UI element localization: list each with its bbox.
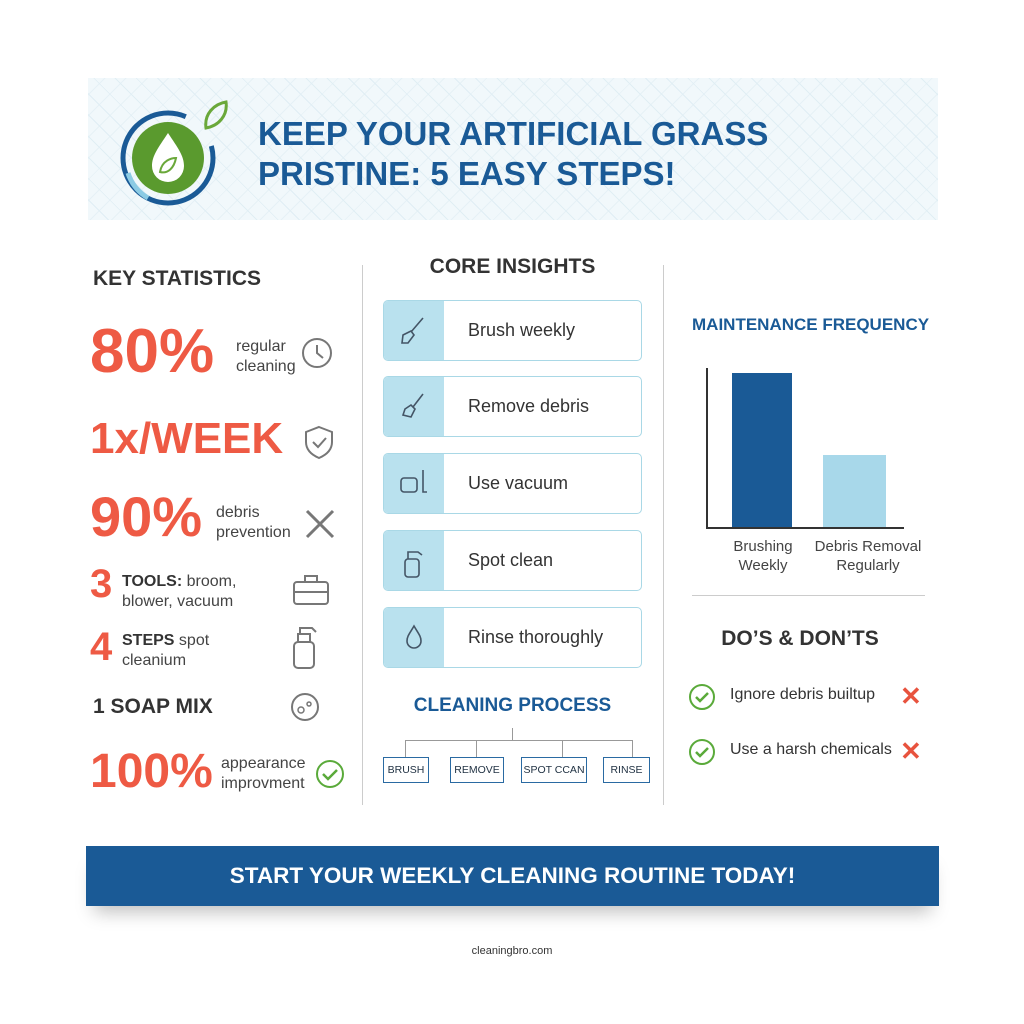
panel: key statistics: regular xyxy=(236,338,286,355)
chart: maintenance frequency xyxy=(692,315,929,574)
panel: dos and donts xyxy=(689,627,922,766)
header band xyxy=(88,78,938,220)
panel: dos and donts: ✕ xyxy=(900,736,922,766)
flow diagram xyxy=(405,728,633,757)
panel: dos and donts: ✕ xyxy=(900,681,922,711)
footer url: cleaningbro.com xyxy=(472,945,552,957)
card: spot clean xyxy=(383,530,642,591)
panel: key statistics: 90% xyxy=(90,485,202,548)
card: brush weekly: Brush weekly xyxy=(468,320,575,340)
text: RINSE xyxy=(610,764,643,776)
text: BRUSH xyxy=(388,764,424,776)
card: rinse: Rinse thoroughly xyxy=(468,627,603,647)
chart: maintenance frequency: Regularly xyxy=(836,557,900,574)
text: REMOVE xyxy=(454,764,500,776)
icon: logo xyxy=(120,100,228,206)
panel: key statistics: 100% xyxy=(90,745,213,798)
panel: dos and donts: Use a harsh chemicals xyxy=(730,741,892,758)
panel: key statistics: cleanium xyxy=(122,652,186,669)
heading: KEY STATISTICS xyxy=(93,267,261,290)
panel: key statistics: prevention xyxy=(216,524,291,541)
card: spot clean: Spot clean xyxy=(468,550,553,570)
heading: CORE INSIGHTS xyxy=(430,255,595,278)
chart: maintenance frequency: Brushing xyxy=(733,538,793,555)
title: PRISTINE: 5 EASY STEPS! xyxy=(258,155,676,192)
footer banner: START YOUR WEEKLY CLEANING ROUTINE TODAY! xyxy=(230,863,795,888)
card: use vacuum: Use vacuum xyxy=(468,473,568,493)
panel: key statistics: 4 xyxy=(90,625,112,669)
heading: cleaning process: CLEANING PROCESS xyxy=(414,695,611,716)
panel: key statistics: improvment xyxy=(221,775,305,792)
footer banner xyxy=(86,846,939,906)
panel: key statistics: cleaning xyxy=(236,358,296,375)
panel: key statistics: STEPS spot xyxy=(122,632,209,649)
panel: dos and donts: Ignore debris builtup xyxy=(730,686,875,703)
card: remove debris xyxy=(383,376,642,437)
chart: maintenance frequency: Weekly xyxy=(739,557,787,574)
panel: key statistics: 1x/WEEK xyxy=(90,414,283,463)
panel: key statistics: 1 SOAP MIX xyxy=(93,695,213,718)
title xyxy=(258,115,768,192)
panel: key statistics: 80% xyxy=(90,317,214,386)
text: SPOT CCAN xyxy=(523,764,585,776)
panel: dos and donts: DO’S & DON’TS xyxy=(721,627,879,650)
card: remove debris: Remove debris xyxy=(468,396,589,416)
panel: key statistics xyxy=(90,267,344,798)
chart: maintenance frequency: MAINTENANCE FREQUENCY xyxy=(692,315,929,334)
panel: key statistics: appearance xyxy=(221,755,306,772)
panel: key statistics: TOOLS: broom, xyxy=(122,573,236,590)
panel: key statistics: debris xyxy=(216,504,260,521)
chart: maintenance frequency: Debris Removal xyxy=(815,538,921,555)
card: rinse xyxy=(383,607,642,668)
card: brush weekly xyxy=(383,300,642,361)
card: use vacuum xyxy=(383,453,642,514)
panel: key statistics: 3 xyxy=(90,562,112,606)
panel: key statistics: blower, vacuum xyxy=(122,593,233,610)
title: KEEP YOUR ARTIFICIAL GRASS xyxy=(258,115,768,152)
